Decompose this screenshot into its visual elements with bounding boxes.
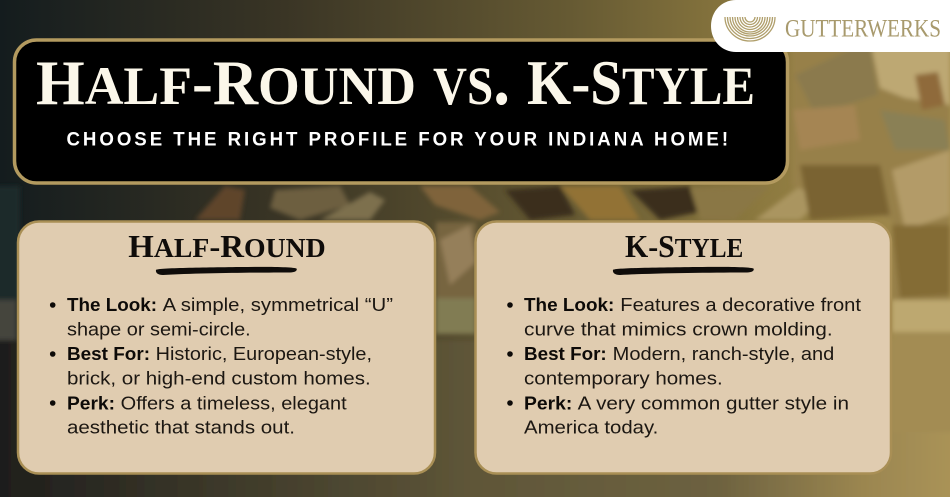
bullet: Perk: Perk:	[67, 393, 115, 413]
bullet: Perk: Perk:	[524, 393, 572, 413]
card background	[18, 222, 435, 474]
bullet: Perk: A very common gutter style in	[578, 393, 849, 413]
bullet: Best For	[50, 344, 372, 389]
bullet: Perk	[507, 393, 849, 438]
bullet: The Look	[50, 295, 393, 340]
panel: K-Style	[476, 222, 891, 474]
title: Half-Round	[36, 35, 416, 121]
bullet: Best For: Best For:	[524, 344, 607, 364]
bullet list	[507, 295, 861, 438]
card background	[476, 222, 891, 474]
bullet: Perk: Offers a timeless, elegant	[121, 393, 347, 413]
bullet: The Look: Features a decorative front	[620, 295, 861, 315]
bullet: The Look: A simple, symmetrical “U”	[163, 295, 393, 315]
logo badge	[711, 0, 950, 52]
brush underline	[613, 267, 754, 275]
bullet: Best For: Historic, European-style,	[156, 344, 372, 364]
logo panel	[711, 0, 950, 52]
bullet: Perk: America today.	[524, 418, 658, 438]
bullet: The Look: The Look:	[67, 295, 157, 315]
bullet: Best For: Modern, ranch-style, and	[613, 344, 834, 364]
bullet: Perk	[50, 393, 347, 438]
title: vs.	[433, 35, 510, 121]
bullet: Best For: contemporary homes.	[524, 369, 723, 389]
heading: K-Style: K-Style	[625, 223, 743, 266]
bullet: The Look	[507, 295, 861, 340]
bullet: The Look: shape or semi-circle.	[67, 320, 251, 340]
bullet: Perk: aesthetic that stands out.	[67, 418, 295, 438]
brush underline	[156, 267, 297, 275]
title: K-Style	[527, 35, 755, 121]
bullet: Best For	[507, 344, 834, 389]
subtitle: CHOOSE THE RIGHT PROFILE FOR YOUR INDIANA HOME!	[66, 130, 731, 150]
bullet: Best For: Best For:	[67, 344, 150, 364]
bullet: The Look: curve that mimics crown molding.	[524, 320, 833, 340]
bullet list	[50, 295, 393, 438]
heading: Half-Round: Half-Round	[128, 223, 326, 266]
title banner	[14, 35, 788, 183]
icon: concentric half circle arcs	[725, 17, 775, 41]
title	[36, 35, 755, 121]
panel: Half-Round	[18, 222, 435, 474]
bullet: Best For: brick, or high-end custom homes.	[67, 369, 371, 389]
banner panel	[14, 40, 788, 183]
bullet: The Look: The Look:	[524, 295, 614, 315]
